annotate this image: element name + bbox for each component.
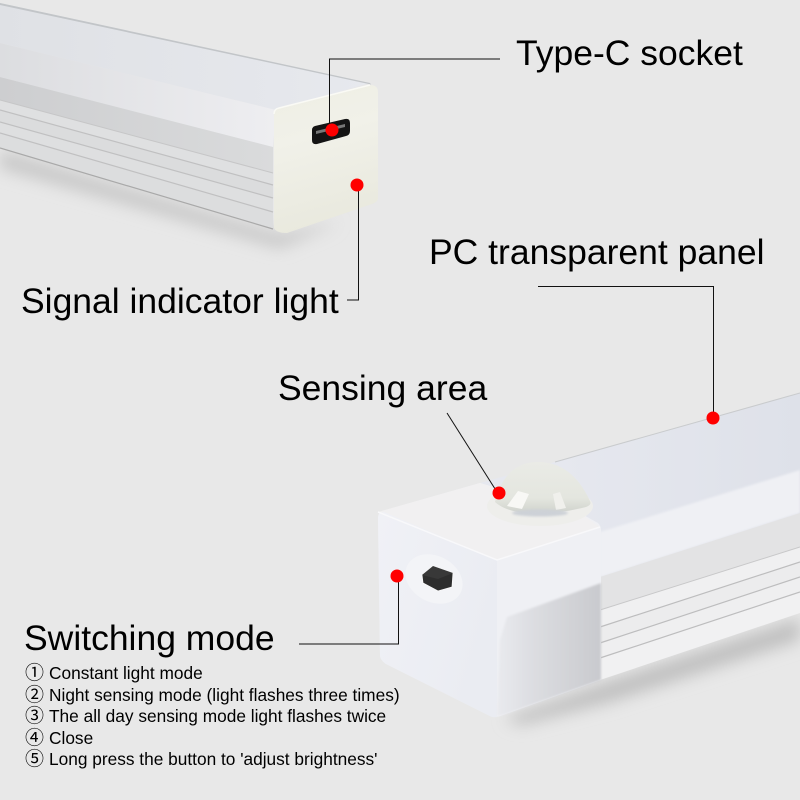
- icon: end cap with Type-C port: [274, 85, 378, 233]
- callout: PC transparent panel: PC transparent panel: [429, 232, 764, 272]
- callout: Type-C socket: Type-C socket: [516, 33, 743, 73]
- icon: mode switch button: [397, 545, 471, 613]
- callout: PC transparent panel: [429, 232, 764, 424]
- callout: Signal indicator light: Signal indicator light: [21, 281, 339, 321]
- text block: mode list: Constant light mode: [49, 663, 203, 683]
- text block: mode list: ②: [25, 684, 44, 706]
- text block: mode list: ④: [25, 727, 44, 749]
- callout: Sensing area: Sensing area: [278, 368, 487, 408]
- heading: Switching mode: Switching mode: [24, 618, 275, 658]
- text block: mode list: ⑤: [25, 748, 44, 770]
- text block: mode list: ①: [25, 662, 44, 684]
- callout: Type-C socket: [326, 33, 743, 136]
- icon: sensor dome: [487, 462, 593, 526]
- top light bar product photo: [0, 3, 378, 248]
- text block: mode list: Long press the button to 'adjust brightness': [49, 749, 377, 769]
- callout: Switching mode leader: [299, 570, 404, 644]
- text block: mode list: Night sensing mode (light flashes three times): [49, 685, 400, 705]
- end cap with sensor housing: [378, 462, 601, 717]
- callout: Sensing area: [278, 368, 506, 500]
- callout: Signal indicator light: [21, 178, 364, 321]
- text block: mode list: [25, 662, 400, 770]
- text block: mode list: ③: [25, 705, 44, 727]
- bottom light bar product photo: [378, 393, 800, 725]
- text block: mode list: The all day sensing mode light flashes twice: [49, 706, 386, 726]
- text block: mode list: Close: [49, 728, 93, 748]
